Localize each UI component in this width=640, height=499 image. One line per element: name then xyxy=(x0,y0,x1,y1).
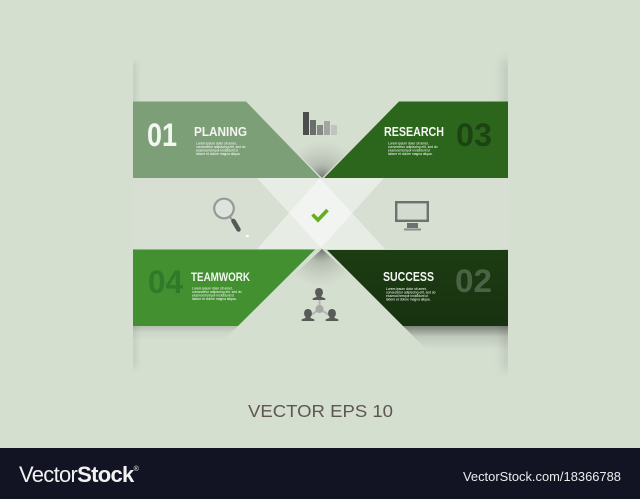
text block: success: consectetur adipiscing elit, sed do xyxy=(386,290,436,294)
number 04: 04 xyxy=(148,264,183,300)
footer url: VectorStock.com/18366788 xyxy=(463,469,621,484)
text block: research: eiusmod tempor incididunt ut xyxy=(388,148,430,152)
text block: planing: labore et dolore magna aliqua. xyxy=(196,152,241,156)
icon: computer monitor xyxy=(396,202,428,230)
heading: success: SUCCESS xyxy=(383,269,434,284)
text block: research: consectetur adipiscing elit, sed do xyxy=(388,145,438,149)
crossing band one xyxy=(257,178,385,249)
text block: success xyxy=(386,287,436,302)
right edge shadow xyxy=(504,60,510,370)
central band xyxy=(133,178,508,249)
heading: planing: PLANING xyxy=(194,124,247,139)
text block: teamwork xyxy=(192,286,242,301)
heading: research: RESEARCH xyxy=(384,124,444,139)
icon: magnifying glass xyxy=(214,199,249,237)
person: right xyxy=(326,309,338,321)
number 03: 03 xyxy=(456,117,492,153)
text block: teamwork: eiusmod tempor incididunt ut xyxy=(192,294,234,298)
text block: planing xyxy=(196,142,246,156)
text block: research xyxy=(388,142,438,156)
footer logo: ® xyxy=(134,465,140,473)
footer logo: VectorStock xyxy=(19,462,134,487)
panel: 01 planing xyxy=(133,102,320,178)
text block: planing: Lorem ipsum dolor sit amet, xyxy=(196,142,237,146)
text block: research: Lorem ipsum dolor sit amet, xyxy=(388,142,429,146)
person: top xyxy=(313,288,325,300)
text block: success: eiusmod tempor incididunt ut xyxy=(386,294,428,298)
shadow under top apex xyxy=(246,101,399,178)
number 01: 01 xyxy=(147,117,177,153)
crossing band two xyxy=(257,178,384,249)
panel: 04 teamwork xyxy=(133,250,315,326)
text block: teamwork: Lorem ipsum dolor sit amet, xyxy=(192,286,233,290)
shadow under bottom apex xyxy=(238,249,404,326)
heading: teamwork: TEAMWORK xyxy=(191,272,251,284)
text block: planing: eiusmod tempor incididunt ut xyxy=(196,148,238,152)
panel: 03 research xyxy=(324,102,508,178)
text block: teamwork: consectetur adipiscing elit, sed do xyxy=(192,290,242,294)
text block: planing: consectetur adipiscing elit, sed do xyxy=(196,145,246,149)
icon: team network xyxy=(302,288,338,321)
left edge shadow xyxy=(133,62,137,368)
center crossing: bands and diamond xyxy=(257,178,385,249)
icon: bar chart xyxy=(303,112,337,135)
bottom right panel shadow xyxy=(403,326,508,350)
text block: teamwork: labore et dolore magna aliqua. xyxy=(192,297,237,301)
bottom left panel shadow xyxy=(133,326,238,341)
caption: VECTOR EPS 10 xyxy=(248,401,393,421)
text block: success: Lorem ipsum dolor sit amet, xyxy=(386,287,427,291)
panel: 02 success xyxy=(327,250,508,326)
number 02: 02 xyxy=(455,263,492,299)
person: left xyxy=(302,309,314,321)
icon: check mark xyxy=(312,210,328,220)
footer bar xyxy=(0,448,640,499)
text block: research: labore et dolore magna aliqua. xyxy=(388,152,433,156)
text block: success: labore et dolore magna aliqua. xyxy=(386,298,431,302)
